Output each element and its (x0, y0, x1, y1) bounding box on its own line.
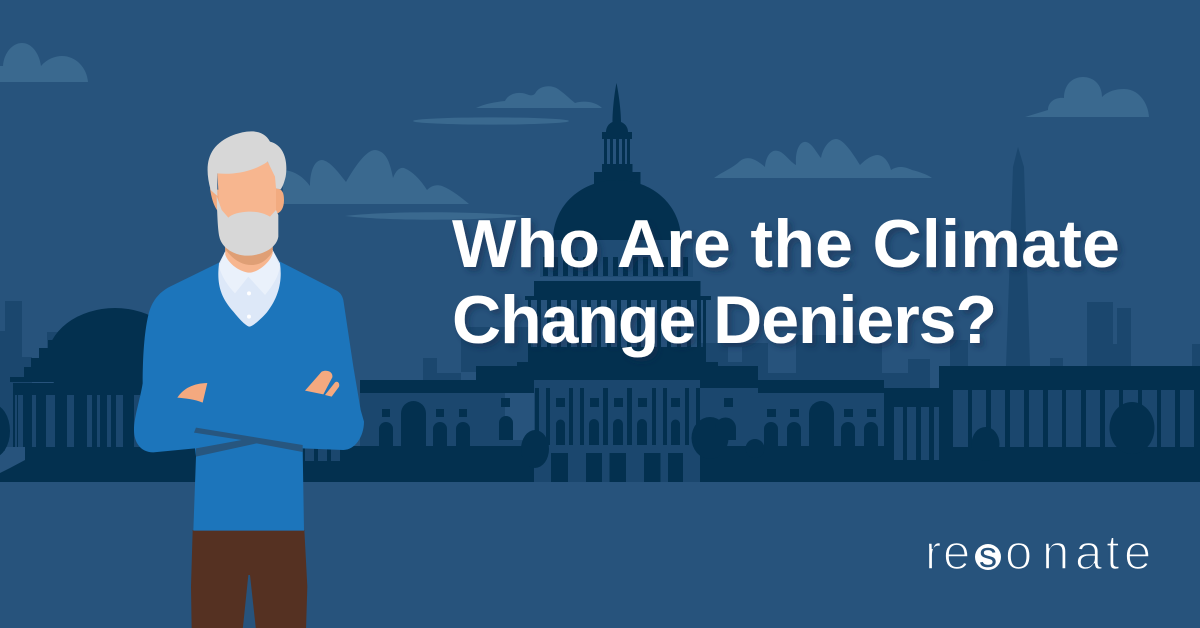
buttons (247, 291, 251, 295)
drum (540, 240, 693, 277)
tree (0, 404, 10, 458)
cloud: top left (0, 43, 88, 82)
cloud: top right (1025, 77, 1149, 117)
clouds (0, 43, 1149, 220)
trees (521, 402, 1154, 468)
trousers (191, 530, 307, 628)
title: Change Deniers? (452, 282, 997, 358)
arm crease (194, 428, 303, 457)
lighter back panels (505, 347, 742, 440)
left hand (177, 383, 207, 403)
logo s: s (979, 534, 997, 575)
cloud: right centre (714, 139, 932, 178)
cloud: top centre (476, 86, 602, 108)
collar (219, 250, 280, 295)
ears (210, 188, 284, 215)
neck shadow (225, 245, 273, 265)
logo: resonate: reonate (925, 526, 1151, 580)
ground (340, 446, 534, 482)
beard (217, 196, 278, 256)
right pavilion columns (884, 390, 1200, 460)
doors (551, 453, 568, 482)
neck (225, 243, 273, 273)
sweater (134, 262, 364, 531)
cloud streak: top centre (413, 117, 569, 125)
building: Capitol (340, 83, 1200, 482)
title: Who Are the Climate (452, 206, 1120, 282)
back skyline (0, 147, 1200, 482)
title (452, 206, 1120, 358)
face (217, 162, 276, 220)
wing windows (379, 398, 878, 447)
person (134, 131, 364, 628)
building: Jefferson memorial (0, 308, 360, 482)
dome (553, 180, 681, 240)
right hand (305, 371, 339, 397)
centre columns (535, 388, 700, 482)
shirt (218, 250, 281, 327)
wing roofs (360, 380, 534, 393)
monument (1006, 147, 1030, 366)
cloud streak: left centre (345, 212, 528, 220)
hair (208, 131, 286, 196)
cloud: left centre (283, 150, 469, 204)
logo mark disc (975, 544, 1001, 570)
spire (602, 83, 632, 139)
